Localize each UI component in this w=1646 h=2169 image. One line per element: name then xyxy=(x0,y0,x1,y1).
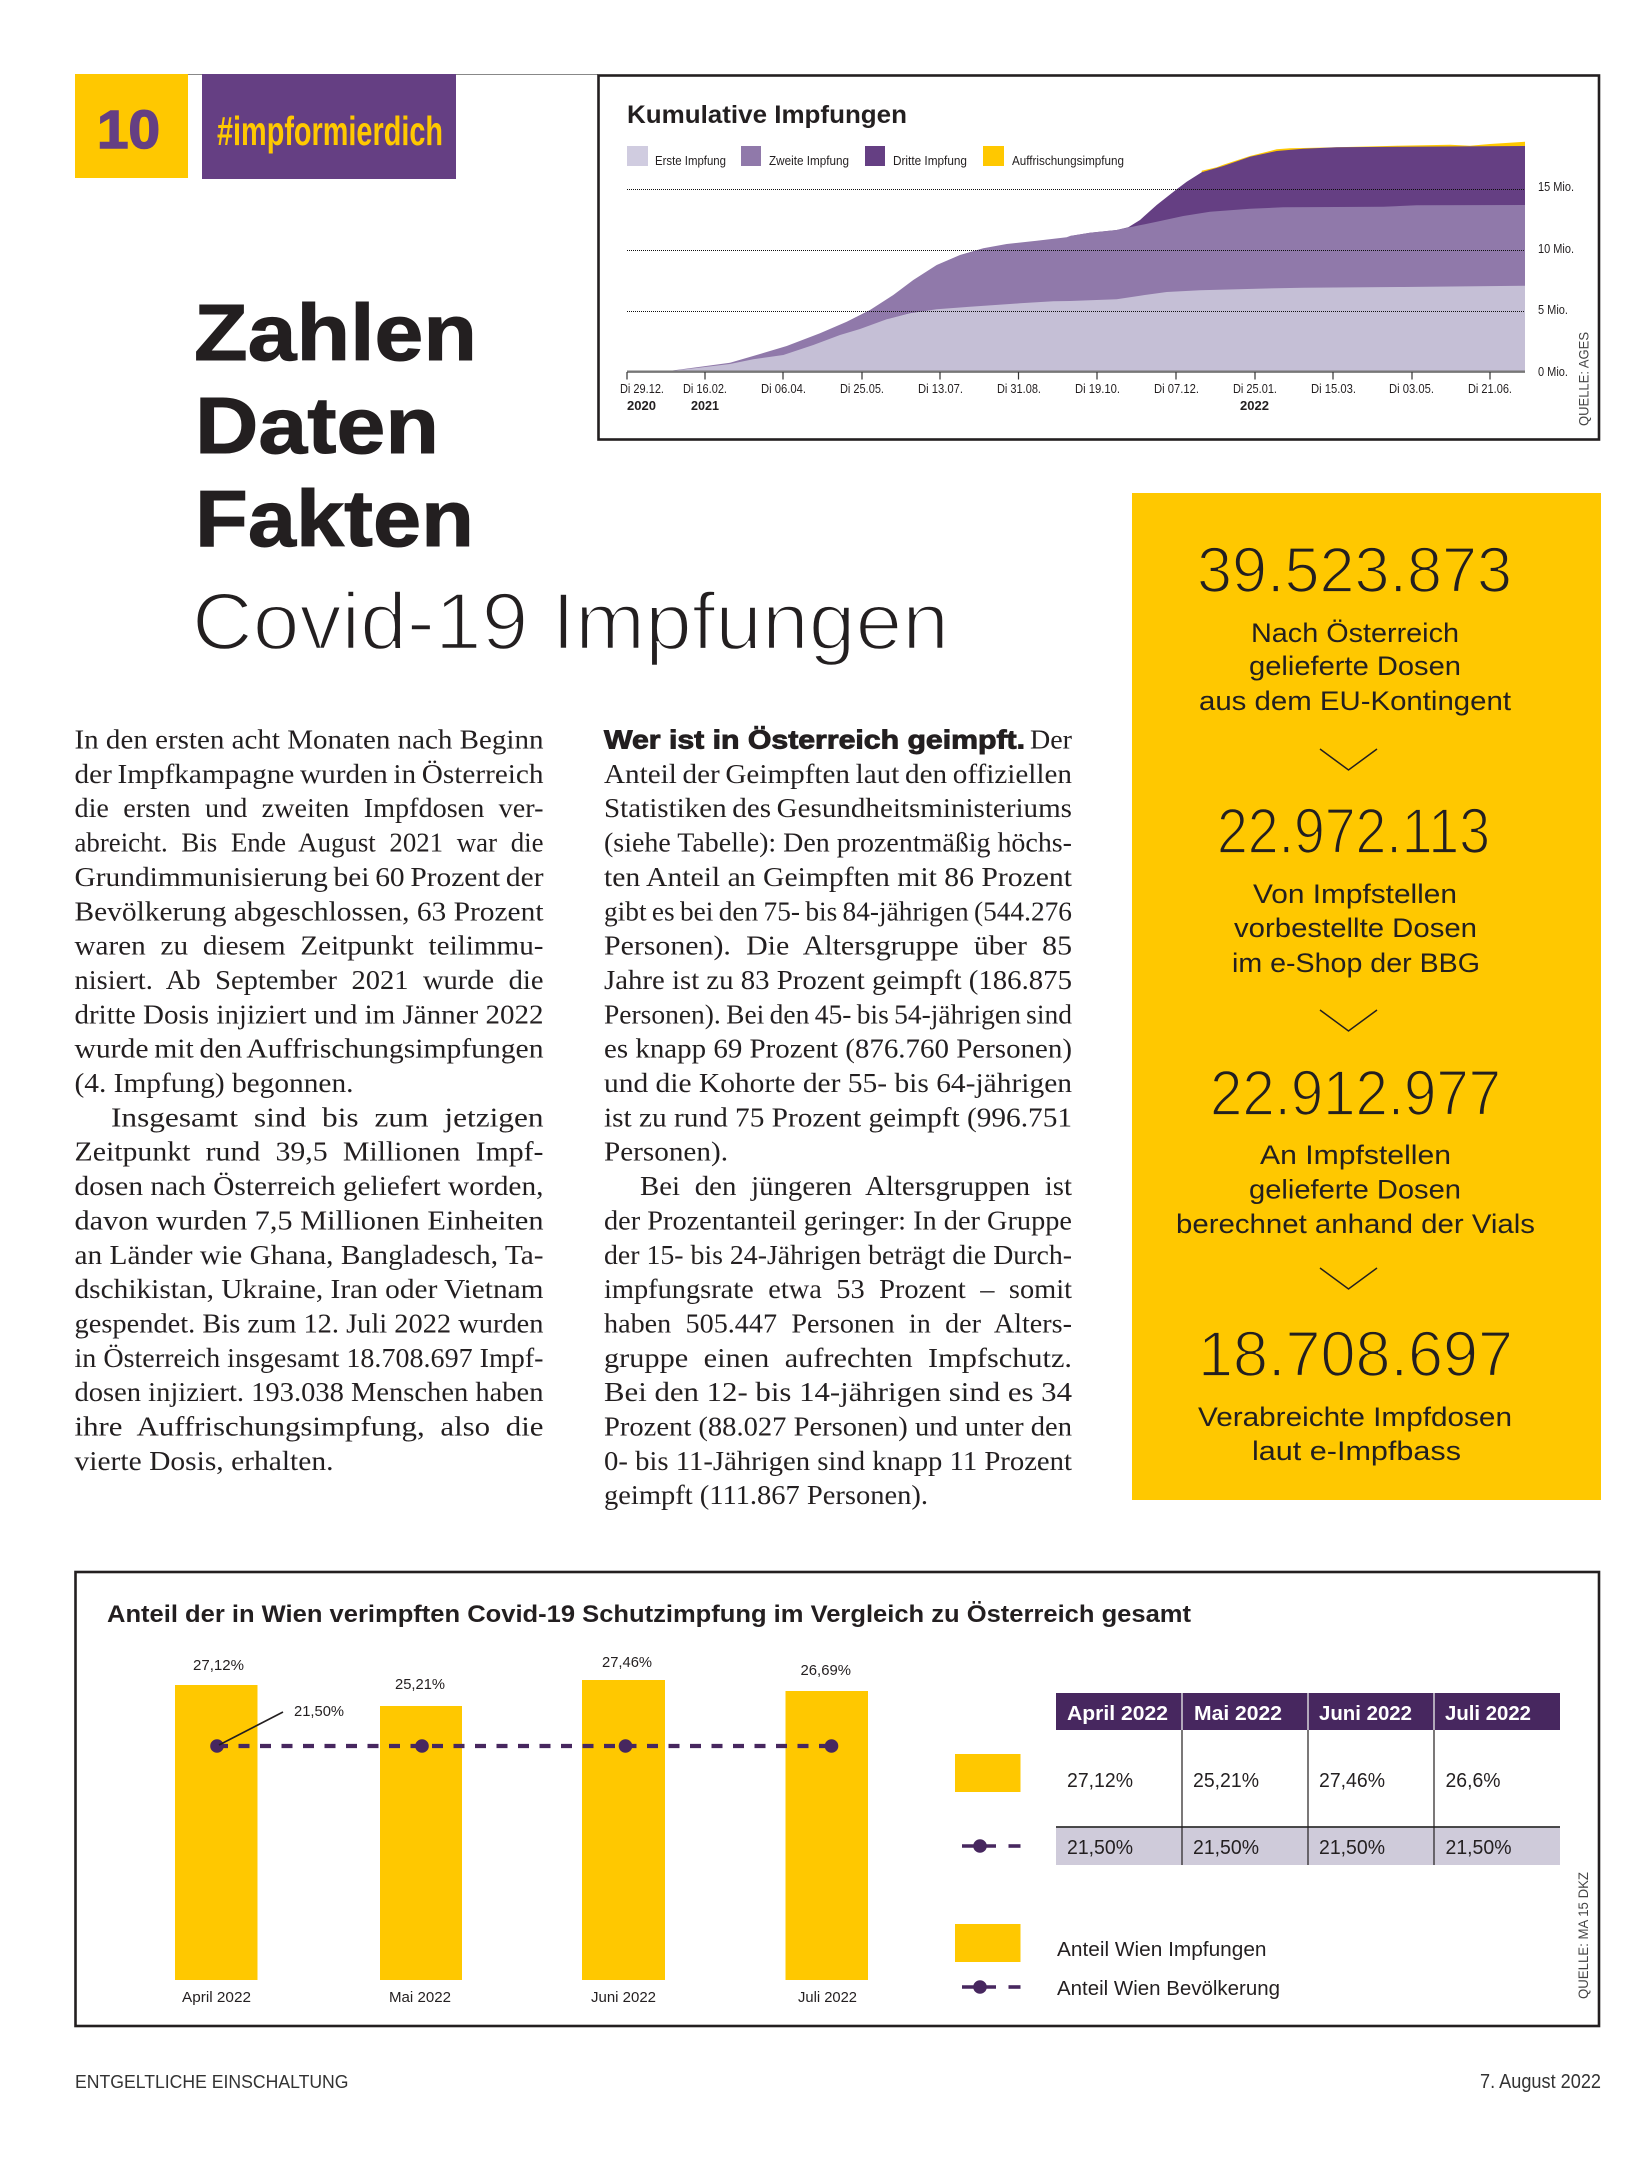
x axis labels: Di 16.02. xyxy=(683,381,727,396)
x axis labels: Di 29.12. xyxy=(620,381,664,396)
text column 1: wurde mit den Auffrischungsimpfungen xyxy=(74,1034,544,1064)
panel: dose figures xyxy=(1132,493,1601,1500)
legend: Anteil Wien Impfungen xyxy=(1057,1939,1266,1961)
arrow: chevron 1 xyxy=(1320,749,1377,770)
data table: 21,50% xyxy=(1067,1837,1133,1859)
text column 2: gibt es bei den 75- bis 84-jährigen (544.276 xyxy=(604,896,1072,926)
table row key: bar xyxy=(955,1754,1020,1792)
bar chart: Juli 2022 xyxy=(798,1989,857,2006)
figure: doses delivered to vaccination sites: An Impfstellen xyxy=(1260,1140,1451,1170)
data table: 21,50% xyxy=(1319,1837,1385,1859)
text column 1 xyxy=(74,724,544,1476)
text column 1: nisiert. Ab September 2021 wurde die xyxy=(74,965,544,995)
bar chart: 25,21% xyxy=(395,1676,445,1693)
arrow: chevron 2 xyxy=(1320,1010,1377,1031)
text column 2: Anteil der Geimpften laut den offiziellen xyxy=(604,759,1073,789)
main heading: Fakten xyxy=(195,474,474,563)
text column 1: an Länder wie Ghana, Bangladesch, Ta- xyxy=(74,1240,544,1270)
panel: cumulative vaccinations chart xyxy=(598,76,1599,440)
text column 2: Personen). Bei den 45- bis 54-jährigen sind xyxy=(604,999,1073,1029)
text column 1: In den ersten acht Monaten nach Beginn xyxy=(74,724,544,754)
text column 2: geimpft (111.867 Personen). xyxy=(604,1480,928,1510)
y axis labels: 5 Mio. xyxy=(1538,302,1568,317)
chart legend xyxy=(627,146,1124,168)
figure: doses delivered to vaccination sites: 22.912.977 xyxy=(1210,1057,1501,1129)
text column 1: ihre Auffrischungsimpfung, also die xyxy=(74,1412,544,1442)
text column 2: Statistiken des Gesundheitsministeriums xyxy=(604,793,1072,823)
text column 1: der Impfkampagne wurden in Österreich xyxy=(74,759,544,789)
bar chart: Mai 2022 xyxy=(389,1989,451,2006)
text column 2: impfungsrate etwa 53 Prozent – somit xyxy=(604,1274,1073,1304)
text column 1: davon wurden 7,5 Millionen Einheiten xyxy=(74,1205,544,1235)
text column 2: Jahre ist zu 83 Prozent geimpft (186.875 xyxy=(604,965,1072,995)
figure: administered doses: laut e-Impfbass xyxy=(1252,1436,1461,1466)
page number badge: 10 xyxy=(97,100,160,160)
text column 2: Prozent (88.027 Personen) und unter den xyxy=(604,1412,1073,1442)
text column 1: vierte Dosis, erhalten. xyxy=(74,1446,334,1476)
x axis labels: Di 15.03. xyxy=(1311,381,1356,396)
figure: pre-ordered doses xyxy=(1217,795,1490,978)
text column 2: der Prozentanteil geringer: In der Gruppe xyxy=(604,1205,1072,1235)
text column 1: gespendet. Bis zum 12. Juli 2022 wurden xyxy=(74,1308,544,1338)
data table: 21,50% xyxy=(1446,1837,1512,1859)
x axis labels: Di 07.12. xyxy=(1154,381,1199,396)
page number badge xyxy=(75,74,188,178)
main heading xyxy=(194,288,477,563)
text column 2: und die Kohorte der 55- bis 64-jährigen xyxy=(604,1068,1073,1098)
figure: delivered doses: 39.523.873 xyxy=(1197,534,1512,606)
x axis labels: 2020 xyxy=(627,398,656,413)
hashtag banner xyxy=(202,74,456,179)
figure: delivered doses: gelieferte Dosen xyxy=(1249,651,1461,681)
text column 2: Personen). Die Altersgruppe über 85 xyxy=(604,931,1072,961)
source note: MA 15 DKZ: QUELLE: MA 15 DKZ xyxy=(1576,1872,1591,1999)
table row key: line xyxy=(962,1839,1020,1853)
text column 1: abreicht. Bis Ende August 2021 war die xyxy=(74,828,544,858)
text column 2 xyxy=(604,724,1073,1510)
y axis labels: 0 Mio. xyxy=(1538,364,1568,379)
figure: administered doses: Verabreichte Impfdosen xyxy=(1198,1402,1512,1432)
panel: Vienna share comparison xyxy=(76,1572,1599,2026)
footer left: ENTGELTLICHE EINSCHALTUNG xyxy=(75,2072,348,2092)
text column 2: ist zu rund 75 Prozent geimpft (996.751 xyxy=(604,1102,1072,1132)
text column 2: Personen). xyxy=(604,1137,728,1167)
arrow: chevron 3 xyxy=(1320,1268,1377,1289)
data table: 27,46% xyxy=(1319,1770,1385,1792)
stacked area chart xyxy=(627,142,1525,380)
text column 1: Insgesamt sind bis zum jetzigen xyxy=(111,1102,544,1132)
figure: pre-ordered doses: vorbestellte Dosen xyxy=(1234,913,1477,943)
y axis labels: 15 Mio. xyxy=(1538,179,1574,194)
text column 1: dritte Dosis injiziert und im Jänner 2022 xyxy=(74,999,544,1029)
y axis labels xyxy=(1538,179,1574,379)
population share line: 21,50% xyxy=(294,1703,344,1720)
text column 2: Bei den 12- bis 14-jährigen sind es 34 xyxy=(604,1377,1073,1407)
bar chart: Juni 2022 xyxy=(591,1989,656,2006)
text column 2: (siehe Tabelle): Den prozentmäßig höchs- xyxy=(604,828,1072,858)
x axis labels: 2022 xyxy=(1240,398,1269,413)
x axis labels: Di 19.10. xyxy=(1075,381,1120,396)
text column 1: dosen nach Österreich geliefert worden, xyxy=(74,1171,544,1201)
source note: AGES: QUELLE: AGES xyxy=(1576,332,1592,426)
x axis labels: Di 25.05. xyxy=(840,381,884,396)
text column 2: Der xyxy=(1030,724,1072,754)
text column 2: haben 505.447 Personen in der Alters- xyxy=(604,1308,1072,1338)
chart title: Kumulative Impfungen xyxy=(627,101,907,129)
bar chart: 26,69% xyxy=(800,1662,851,1679)
text column 1: dschikistan, Ukraine, Iran oder Vietnam xyxy=(74,1274,544,1304)
legend xyxy=(955,1924,1280,2000)
figure: administered doses xyxy=(1198,1318,1513,1466)
text column 2: es knapp 69 Prozent (876.760 Personen) xyxy=(604,1034,1072,1064)
text column 2: gruppe einen aufrechten Impfschutz. xyxy=(604,1343,1072,1373)
x axis labels: Di 13.07. xyxy=(918,381,963,396)
data table xyxy=(1056,1693,1560,1865)
subheading: Covid-19 Impfungen xyxy=(192,577,949,667)
hashtag banner: #impformierdich xyxy=(217,108,443,154)
text column 1: Grundimmunisierung bei 60 Prozent der xyxy=(74,862,544,892)
x axis labels: Di 31.08. xyxy=(997,381,1041,396)
text column 1: Zeitpunkt rund 39,5 Millionen Impf- xyxy=(74,1137,544,1167)
x axis labels: Di 06.04. xyxy=(761,381,806,396)
text column 1: (4. Impfung) begonnen. xyxy=(74,1068,354,1098)
data table: Juli 2022 xyxy=(1445,1703,1531,1725)
text column 2: der 15- bis 24-Jährigen beträgt die Durch- xyxy=(604,1240,1072,1270)
figure: delivered doses: Nach Österreich xyxy=(1251,618,1459,648)
data table: 21,50% xyxy=(1193,1837,1259,1859)
data table: Juni 2022 xyxy=(1319,1703,1412,1725)
text column 2: Bei den jüngeren Altersgruppen ist xyxy=(640,1171,1073,1201)
bar chart xyxy=(175,1654,868,2006)
main heading: Daten xyxy=(195,381,439,470)
panel title: Anteil der in Wien verimpften Covid-19 Schutzimpfung im Vergleich zu Österreich gesamt xyxy=(107,1601,1191,1628)
text column 1: waren zu diesem Zeitpunkt teilimmu- xyxy=(74,931,544,961)
text column 2: ten Anteil an Geimpften mit 86 Prozent xyxy=(604,862,1073,892)
figure: pre-ordered doses: Von Impfstellen xyxy=(1253,879,1457,909)
x axis labels: Di 25.01. xyxy=(1233,381,1277,396)
text column 1: in Österreich insgesamt 18.708.697 Impf- xyxy=(74,1343,544,1373)
x axis labels: Di 21.06. xyxy=(1468,381,1512,396)
chart legend: Dritte Impfung xyxy=(893,153,967,168)
bar chart: April 2022 xyxy=(182,1989,251,2006)
text column 1: Bevölkerung abgeschlossen, 63 Prozent xyxy=(74,896,544,926)
text column 2: Wer ist in Österreich geimpft. xyxy=(604,724,1025,754)
data table: Mai 2022 xyxy=(1194,1703,1282,1725)
figure: doses delivered to vaccination sites: berechnet anhand der Vials xyxy=(1176,1209,1535,1239)
footer date: 7. August 2022 xyxy=(1480,2071,1601,2093)
chart legend: Erste Impfung xyxy=(655,153,726,168)
chart legend: Zweite Impfung xyxy=(769,153,849,168)
figure: administered doses: 18.708.697 xyxy=(1198,1318,1513,1390)
data table: 27,12% xyxy=(1067,1770,1133,1792)
bar chart: 27,46% xyxy=(602,1654,652,1671)
figure: delivered doses: aus dem EU-Kontingent xyxy=(1199,686,1512,716)
main heading: Zahlen xyxy=(194,288,477,377)
x axis labels: Di 03.05. xyxy=(1389,381,1434,396)
figure: pre-ordered doses: 22.972.113 xyxy=(1217,795,1490,867)
y axis labels: 10 Mio. xyxy=(1538,241,1574,256)
text column 1: dosen injiziert. 193.038 Menschen haben xyxy=(74,1377,544,1407)
text column 2: 0- bis 11-Jährigen sind knapp 11 Prozent xyxy=(604,1446,1073,1476)
text column 1: die ersten und zweiten Impfdosen ver- xyxy=(74,793,544,823)
figure: doses delivered to vaccination sites xyxy=(1176,1057,1535,1239)
figure: doses delivered to vaccination sites: gelieferte Dosen xyxy=(1249,1174,1461,1204)
bar chart: 27,12% xyxy=(193,1657,244,1674)
figure: pre-ordered doses: im e-Shop der BBG xyxy=(1232,948,1480,978)
data table: 25,21% xyxy=(1193,1770,1259,1792)
legend: Anteil Wien Bevölkerung xyxy=(1057,1978,1280,2000)
chart legend: Auffrischungsimpfung xyxy=(1012,153,1124,168)
population share line xyxy=(210,1703,838,1753)
data table: April 2022 xyxy=(1067,1703,1168,1725)
x axis labels: 2021 xyxy=(691,398,719,413)
x axis labels xyxy=(620,381,1512,413)
figure: delivered doses xyxy=(1197,534,1512,716)
data table: 26,6% xyxy=(1446,1770,1501,1792)
